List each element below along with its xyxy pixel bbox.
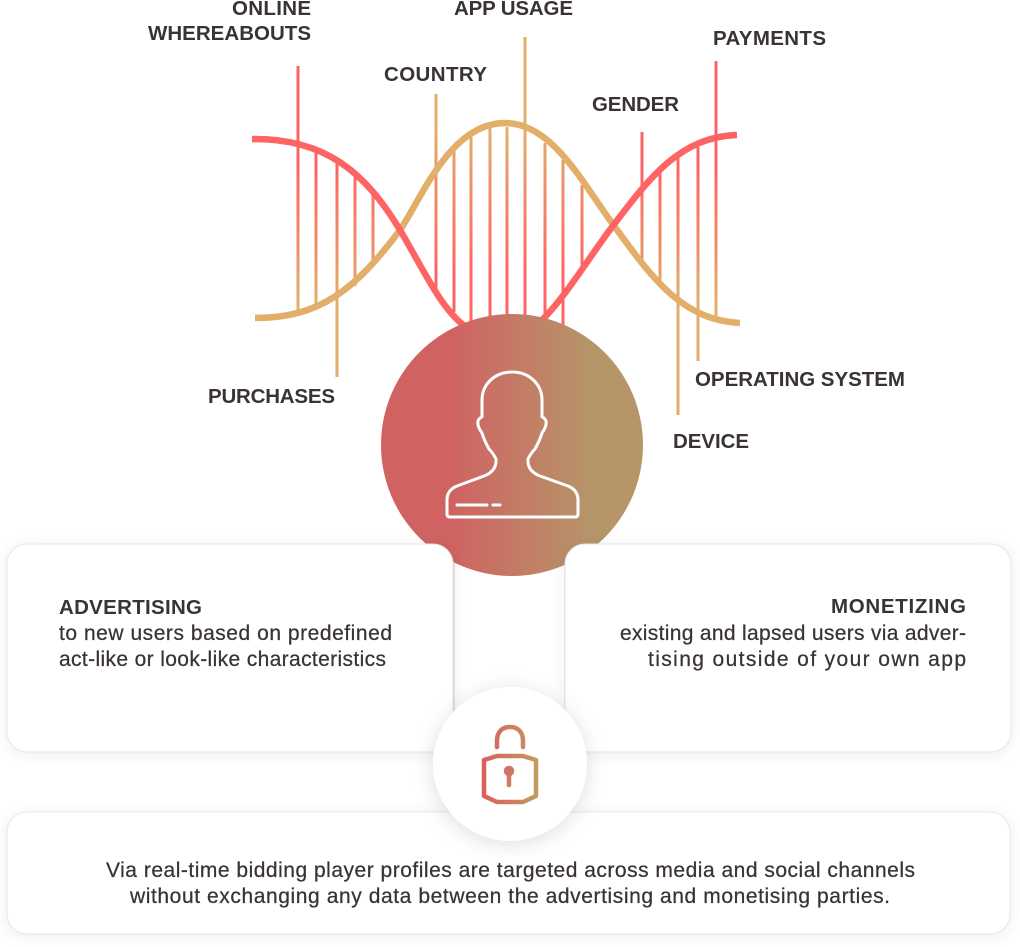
label: online whereabouts: WHEREABOUTS	[148, 22, 311, 45]
dna helix diagram	[252, 37, 740, 415]
advertising text	[59, 622, 392, 671]
icon: user profile	[447, 372, 578, 517]
red curve	[252, 135, 737, 330]
connector strip	[454, 555, 565, 710]
label: payments: PAYMENTS	[713, 27, 826, 50]
profile circle	[381, 314, 643, 576]
note text: without exchanging any data between the advertising and monetising parties.	[129, 885, 890, 908]
monetizing text: tising outside of your own app	[648, 648, 966, 671]
gold curve	[255, 123, 740, 323]
monetizing heading: MONETIZING	[831, 595, 966, 618]
advertising heading: ADVERTISING	[59, 596, 202, 619]
panel: monetizing	[565, 544, 1011, 752]
panel: real-time bidding note	[7, 812, 1010, 934]
advertising text: act-like or look-like characteristics	[59, 648, 386, 671]
note text	[106, 859, 915, 908]
monetizing text	[620, 622, 966, 671]
panel: advertising	[7, 544, 453, 752]
advertising text: to new users based on predefined	[59, 622, 392, 645]
label: operating system: OPERATING SYSTEM	[695, 368, 905, 391]
label: gender: GENDER	[592, 93, 679, 116]
label: purchases: PURCHASES	[208, 385, 335, 408]
data strands: outer groups	[298, 37, 716, 415]
label: online whereabouts	[148, 0, 311, 45]
label: device: DEVICE	[673, 430, 749, 453]
icon: padlock	[484, 727, 536, 802]
label: country: COUNTRY	[384, 63, 487, 86]
lock badge	[433, 687, 587, 841]
monetizing text: existing and lapsed users via adver-	[620, 622, 966, 645]
note text: Via real-time bidding player profiles are targeted across media and social channels	[106, 859, 915, 882]
